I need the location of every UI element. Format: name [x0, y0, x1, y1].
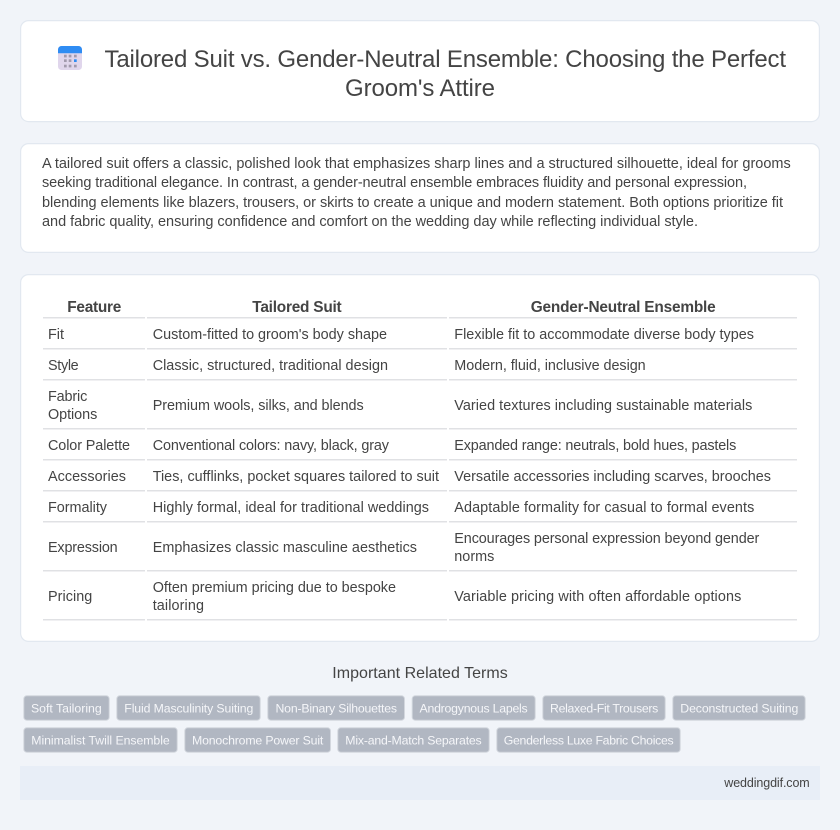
intro paragraph: and fabric quality, ensuring confidence and comfort on the wedding day while reflecting individual style.	[42, 214, 698, 230]
tag	[24, 696, 109, 720]
row: fabric options: Varied textures including sustainable materials	[454, 398, 752, 414]
row: style: Style	[48, 358, 79, 374]
row: formality: Adaptable formality for casual to formal events	[454, 500, 754, 516]
tag: Fluid Masculinity Suiting	[124, 701, 253, 715]
tag: Non-Binary Silhouettes	[276, 701, 397, 715]
row: style	[48, 358, 646, 374]
row: fabric options: Premium wools, silks, and blends	[153, 398, 364, 414]
row: color palette: Color Palette	[48, 438, 130, 454]
tag	[497, 728, 680, 752]
row: fit	[48, 327, 754, 343]
row: pricing	[48, 580, 741, 614]
panel: introduction	[21, 144, 819, 252]
tag: Androgynous Lapels	[420, 701, 528, 715]
row: accessories: Accessories	[48, 469, 126, 485]
row: expression: norms	[454, 549, 494, 565]
row: color palette	[48, 438, 736, 454]
tag: Minimalist Twill Ensemble	[31, 733, 170, 747]
related term tags	[24, 696, 805, 752]
tag	[412, 696, 535, 720]
row: color palette: Conventional colors: navy, black, gray	[153, 438, 390, 454]
row: fabric options	[48, 389, 752, 423]
heading: important related terms: Important Related Terms	[332, 665, 508, 682]
icon: calendar	[58, 46, 82, 70]
intro paragraph: blending elements like blazers, trousers, or skirts to create a unique and modern statement. Both options prioritize fit	[42, 195, 783, 211]
tag	[185, 728, 330, 752]
table header row	[67, 299, 716, 316]
row: pricing: Often premium pricing due to bespoke	[153, 580, 396, 596]
tag: Mix-and-Match Separates	[345, 733, 482, 747]
row: fabric options: Fabric	[48, 389, 87, 405]
row: expression: Emphasizes classic masculine aesthetics	[153, 540, 417, 556]
row: fabric options: Options	[48, 407, 97, 423]
row: fit: Custom-fitted to groom's body shape	[153, 327, 387, 343]
title: Groom's Attire	[345, 75, 495, 102]
row: fit: Flexible fit to accommodate diverse body types	[454, 327, 754, 343]
row: pricing: tailoring	[153, 598, 204, 614]
row: formality: Highly formal, ideal for traditional weddings	[153, 500, 429, 516]
intro paragraph: A tailored suit offers a classic, polished look that emphasizes sharp lines and a structured silhouette, ideal for grooms	[42, 156, 791, 172]
tag: Genderless Luxe Fabric Choices	[504, 733, 674, 747]
table header row: Tailored Suit	[252, 299, 342, 316]
row: formality: Formality	[48, 500, 108, 516]
footer bar: weddingdif.com	[723, 776, 810, 790]
row: expression	[48, 531, 760, 565]
row: formality	[48, 500, 754, 516]
row: style: Classic, structured, traditional design	[153, 358, 388, 374]
panel: header	[21, 21, 819, 122]
tag	[117, 696, 260, 720]
tag	[24, 728, 177, 752]
row: fit: Fit	[48, 327, 64, 343]
tag: Relaxed-Fit Trousers	[550, 701, 658, 715]
intro paragraph	[42, 156, 791, 230]
row: accessories: Versatile accessories including scarves, brooches	[454, 469, 771, 485]
row: expression: Encourages personal expression beyond gender	[454, 531, 760, 547]
tag: Deconstructed Suiting	[680, 701, 798, 715]
title: Tailored Suit vs. Gender-Neutral Ensemble: Choosing the Perfect	[104, 46, 786, 73]
row: accessories: Ties, cufflinks, pocket squares tailored to suit	[153, 469, 439, 485]
row: accessories	[48, 469, 771, 485]
title	[104, 46, 786, 102]
row: pricing: Pricing	[48, 589, 92, 605]
table header row: Feature	[67, 299, 122, 316]
tag	[673, 696, 805, 720]
tag	[543, 696, 665, 720]
tag	[268, 696, 404, 720]
table header row: Gender-Neutral Ensemble	[531, 299, 716, 316]
tag: Monochrome Power Suit	[192, 733, 324, 747]
row: color palette: Expanded range: neutrals, bold hues, pastels	[454, 438, 736, 454]
panel: comparison table	[21, 275, 819, 641]
footer bar	[20, 766, 820, 800]
row: expression: Expression	[48, 540, 118, 556]
row: style: Modern, fluid, inclusive design	[454, 358, 646, 374]
row: pricing: Variable pricing with often affordable options	[454, 589, 741, 605]
tag	[338, 728, 489, 752]
tag: Soft Tailoring	[31, 701, 102, 715]
intro paragraph: seeking traditional elegance. In contrast, a gender-neutral ensemble embraces fluidity and personal expression,	[42, 175, 747, 191]
